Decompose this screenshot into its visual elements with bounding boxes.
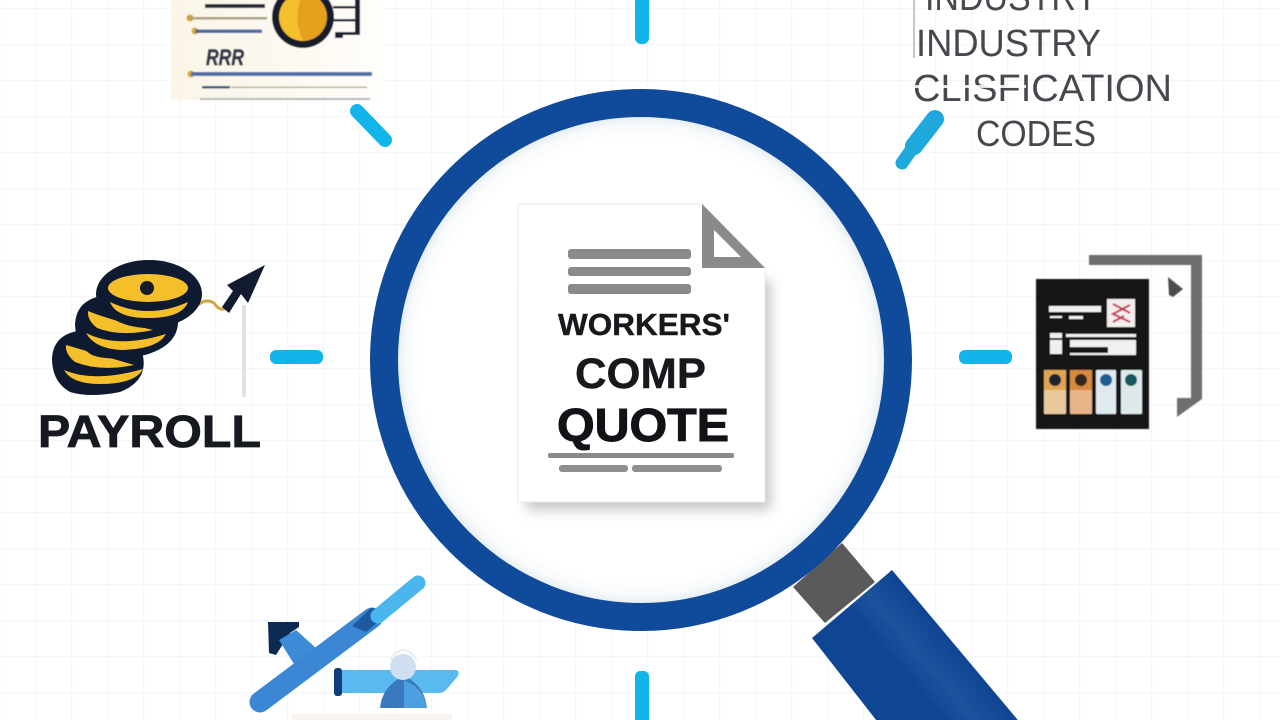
footer line two: [559, 465, 722, 472]
gavel collar: [352, 608, 379, 632]
arrow stem: [242, 305, 246, 397]
gavel long handle: [260, 618, 372, 702]
spoke: top left: [357, 111, 385, 140]
scale bar: [338, 670, 459, 693]
gavel head: [268, 622, 299, 655]
garbled overlay: [913, 85, 1026, 88]
folded corner: [702, 204, 765, 268]
lens ring: [384, 103, 898, 617]
title line: comp: COMP: [575, 350, 706, 398]
spoke: top: [635, 0, 649, 44]
figure head: [390, 654, 416, 680]
document sheet: [518, 204, 765, 502]
figure halo: [390, 650, 417, 660]
scale cap: [334, 668, 342, 696]
small arrow mark: [1168, 277, 1183, 297]
white form bars: [1049, 306, 1136, 355]
tab one: [1044, 370, 1066, 414]
colored tabs: [1044, 370, 1142, 414]
ladder graphic: [333, 0, 360, 38]
document: workers' comp quote: [518, 204, 771, 510]
lens glass: [396, 115, 886, 605]
tab two: [1070, 370, 1092, 414]
icon: report card, top left: [171, 0, 381, 100]
figure body: [380, 678, 427, 708]
footer row: [202, 86, 367, 88]
icon: payroll coins and arrow: [38, 260, 265, 457]
spoke: left: [270, 350, 323, 364]
heading line three: CODES: [976, 113, 1096, 154]
title line: workers': WORKERS': [558, 307, 730, 342]
icon: forms document, right: [1036, 255, 1202, 429]
label: payroll: PAYROLL: [38, 406, 261, 457]
top coin: [96, 260, 202, 328]
tab three: [1096, 370, 1116, 414]
red mark box: [1107, 299, 1135, 327]
spoke: right: [959, 350, 1012, 364]
handle connector: [793, 543, 875, 623]
figure light side: [404, 680, 427, 708]
heading line one: INDUSTRY: [916, 23, 1101, 65]
coin: [272, 0, 334, 48]
arrow head: [222, 265, 265, 313]
front sheet: [1036, 279, 1149, 429]
spoke: top right: [902, 119, 935, 163]
spoke: bottom: [635, 671, 649, 720]
tan row: [186, 14, 267, 22]
title line: quote: QUOTE: [557, 399, 729, 451]
bottom coin: [52, 330, 144, 395]
tab four: [1121, 370, 1142, 414]
header lines: [568, 249, 691, 294]
card background: [171, 0, 381, 100]
text block: industry classification codes: [913, 0, 1172, 154]
blue row: [192, 28, 262, 34]
magnifying glass: [384, 103, 1022, 720]
handle grip: [812, 570, 1022, 720]
arrow link: [198, 301, 226, 309]
left rule: [913, 0, 915, 58]
long blue row: [188, 70, 372, 78]
heading line two: CLISFICATION: [913, 68, 1172, 110]
middle coin: [75, 295, 178, 358]
heading bar: [205, 4, 265, 8]
faint base band: [292, 714, 452, 720]
document shadow: [526, 280, 771, 510]
icon: gavel and scale, bottom left: [260, 583, 459, 720]
garbled label: RRR: [206, 45, 244, 70]
card shadow line: [200, 98, 370, 100]
gavel light tip: [378, 583, 418, 616]
gavel neck: [279, 630, 316, 664]
back sheet outline: [1089, 255, 1202, 417]
footer line one: [548, 453, 734, 458]
